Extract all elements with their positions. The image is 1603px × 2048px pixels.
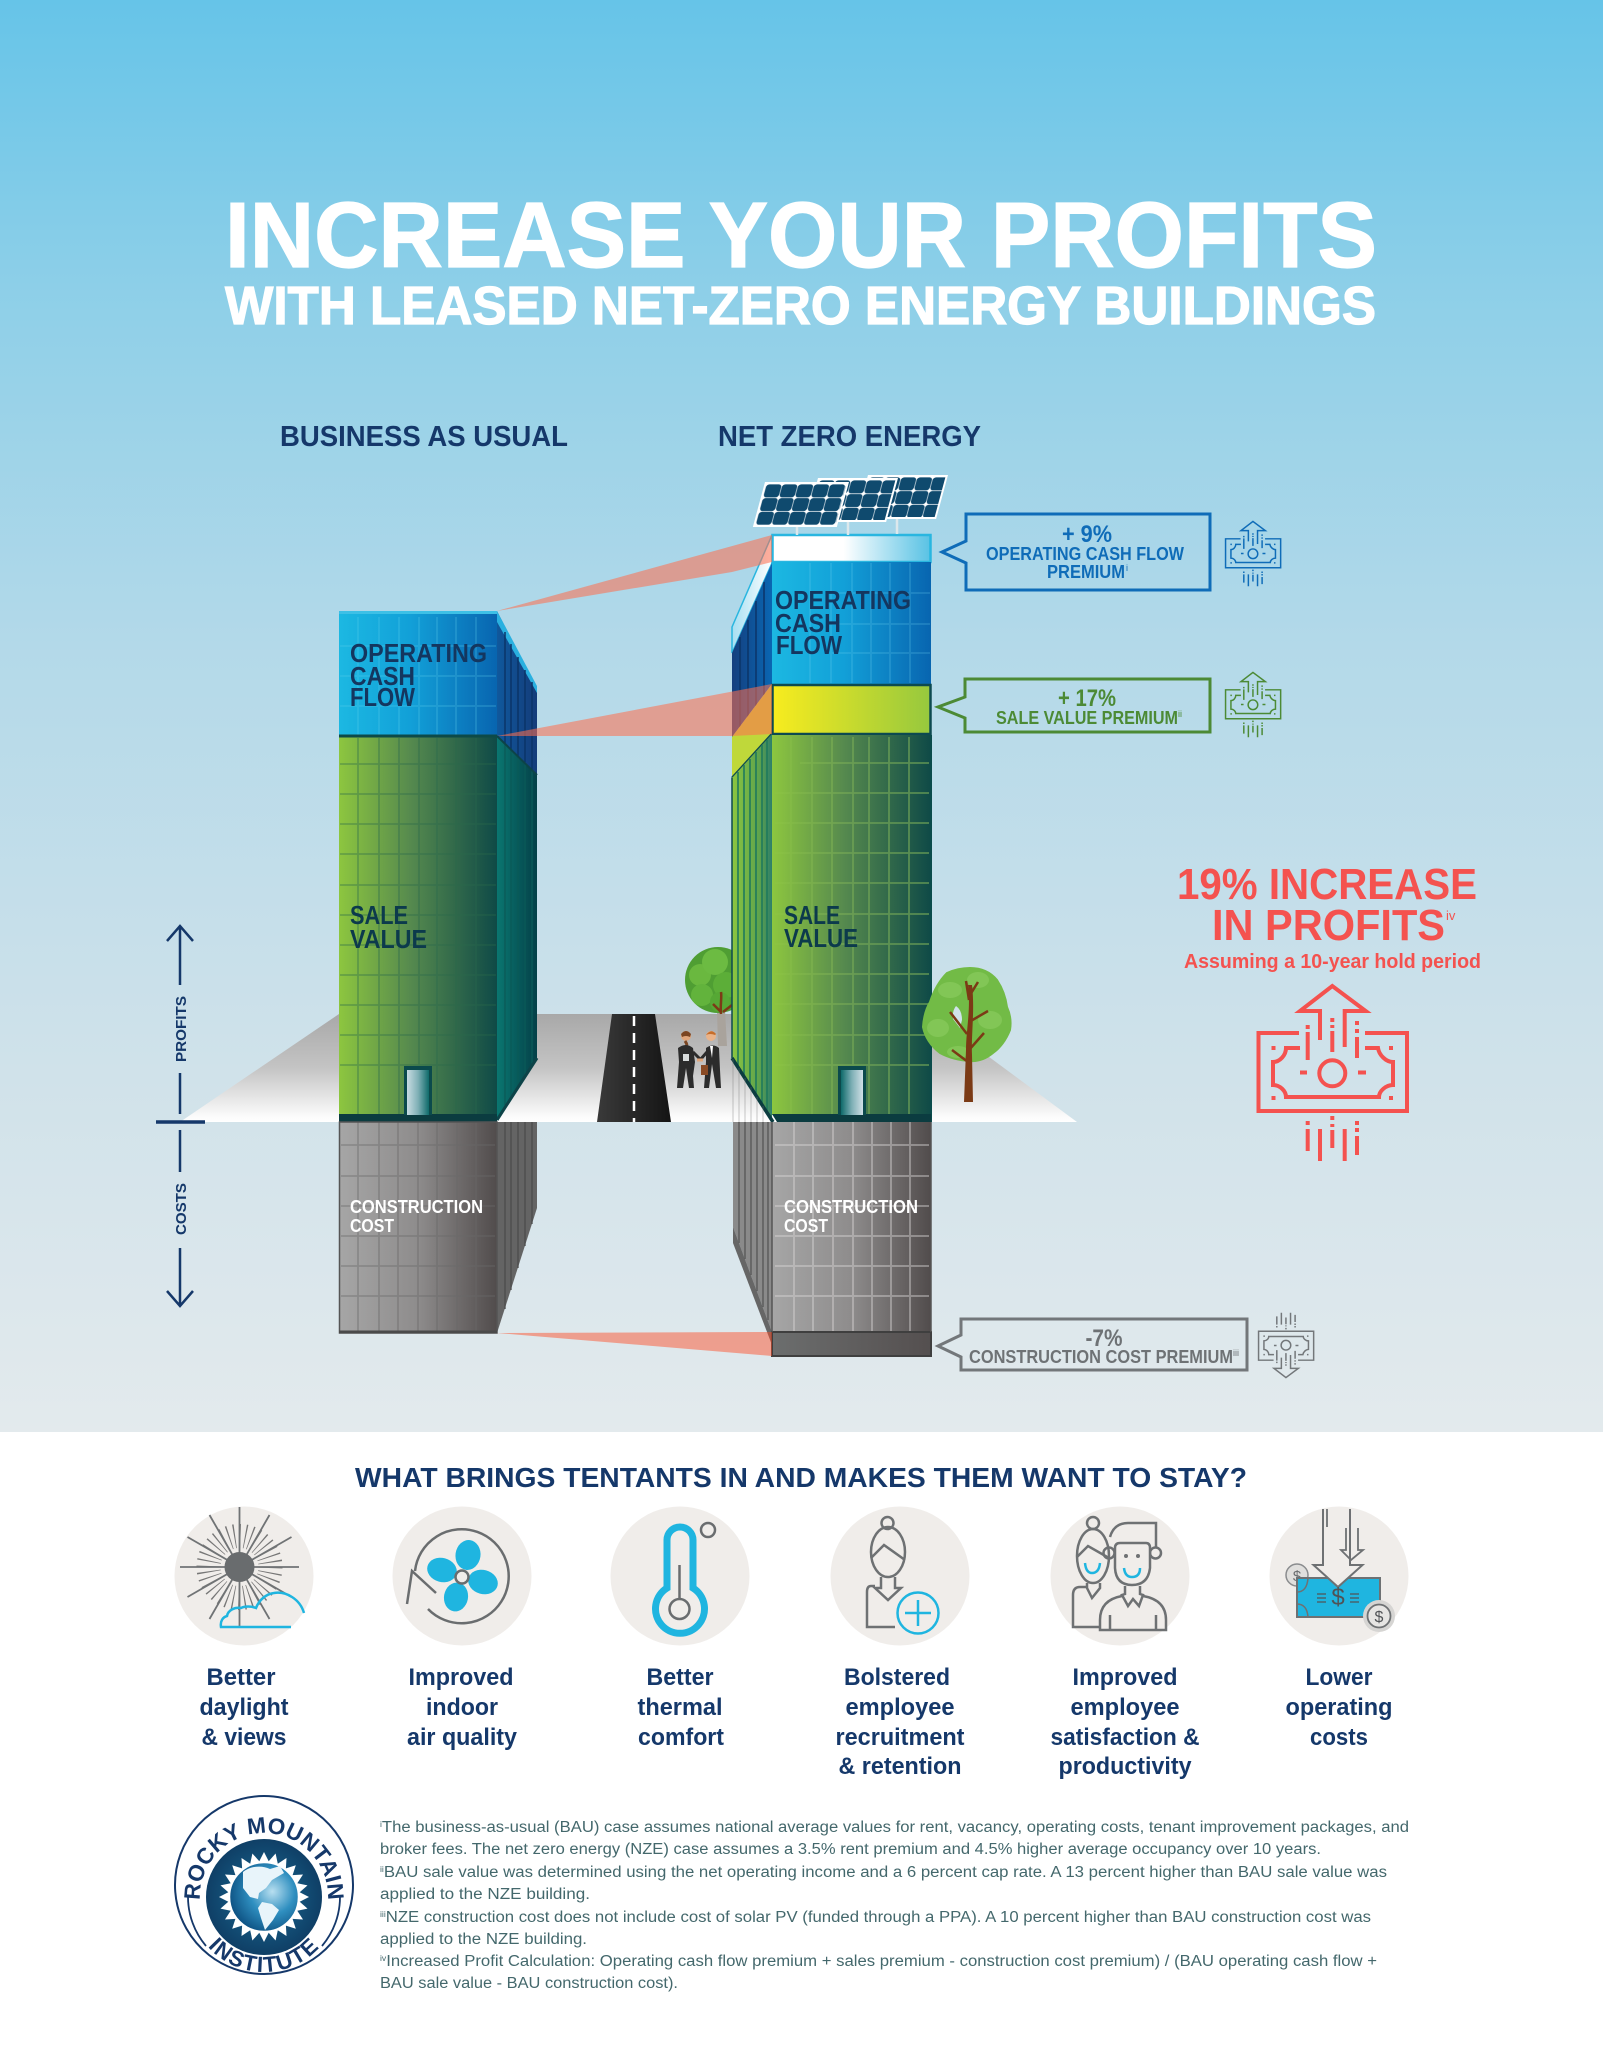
label: thermal comfort — [638, 1664, 724, 1751]
building labels: OPERATING — [350, 638, 487, 668]
icon: money up blue — [1226, 521, 1281, 586]
icon: thermometer — [610, 1506, 750, 1646]
label: satisfaction and productivity: Improved — [1072, 1664, 1178, 1691]
section: operating cash flow NZE — [732, 562, 931, 737]
footnotes: applied to the NZE building. — [380, 1886, 590, 1903]
label: satisfaction and productivity: employee — [1070, 1694, 1180, 1721]
label: daylight: Better — [206, 1664, 276, 1691]
callout: operating cash flow premium: PREMIUM — [1047, 562, 1125, 582]
building labels: VALUE — [784, 923, 858, 953]
section: sale value premium NZE — [732, 684, 930, 778]
door BAU — [404, 1066, 432, 1115]
building labels: COST — [350, 1216, 394, 1236]
label: lower operating costs: operating — [1286, 1694, 1392, 1721]
label: daylight — [200, 1664, 288, 1751]
heading: net zero energy: NET ZERO ENERGY — [718, 421, 981, 453]
callout: 19 percent increase in profits: iv — [1446, 908, 1456, 923]
icon: lower operating costs: $ — [1293, 1568, 1302, 1585]
building labels — [350, 585, 918, 1236]
footnotes: iii — [380, 1910, 386, 1919]
section: construction cost BAU — [339, 1122, 537, 1333]
section: operating cash flow BAU — [339, 611, 537, 775]
building labels: VALUE — [350, 924, 427, 954]
footnotes: i — [380, 1820, 382, 1829]
callout: sale value premium — [938, 679, 1210, 732]
label: recruitment and retention: Bolstered — [844, 1664, 950, 1691]
title: WITH LEASED NET-ZERO ENERGY BUILDINGS — [225, 276, 1376, 336]
label: satisfaction and productivity: productivity — [1058, 1753, 1192, 1780]
label: daylight: daylight — [200, 1694, 288, 1721]
highlight wedge: construction cost difference — [497, 1332, 772, 1356]
axis: profits and costs: COSTS — [173, 1183, 190, 1235]
background sky panel — [0, 0, 1603, 1432]
callout: construction cost premium: CONSTRUCTION COST PREMIUM — [969, 1347, 1233, 1367]
label: lower operating costs — [1286, 1664, 1392, 1751]
icon: money up red large — [1258, 986, 1407, 1161]
label: indoor air quality — [407, 1664, 518, 1751]
label: indoor air quality: Improved — [408, 1664, 514, 1691]
label: lower operating costs: Lower — [1306, 1664, 1372, 1691]
footnotes: The business-as-usual (BAU) case assumes national average values for rent, vacancy, operating costs, tenant improvement packages, and — [382, 1819, 1409, 1836]
solar panels — [753, 475, 948, 535]
label: recruitment and retention: recruitment — [836, 1724, 964, 1751]
label: indoor air quality: indoor — [426, 1694, 498, 1721]
callout: construction cost premium — [938, 1319, 1247, 1370]
axis: profits and costs: PROFITS — [173, 996, 190, 1062]
building labels: FLOW — [350, 682, 415, 712]
title: INCREASE YOUR PROFITS — [225, 183, 1377, 287]
road — [597, 1014, 671, 1122]
footnotes: Increased Profit Calculation: Operating cash flow premium + sales premium - construction cost premium) / (BAU operating cash flow + — [386, 1953, 1377, 1970]
building labels: OPERATING — [775, 585, 911, 615]
axis: profits and costs — [156, 926, 205, 1306]
footnotes: applied to the NZE building. — [380, 1931, 587, 1948]
highlight wedge: operating cash flow difference — [497, 535, 772, 611]
large tree — [923, 968, 1011, 1102]
logo: Rocky Mountain Institute: ROCKY MOUNTAIN — [184, 1817, 344, 1899]
callout: 19 percent increase in profits: Assuming a 10-year hold period — [1184, 951, 1481, 973]
building: net zero energy — [732, 535, 931, 1356]
heading: business as usual: BUSINESS AS USUAL — [280, 421, 568, 453]
callout: 19 percent increase in profits: 19% INCREASE — [1177, 861, 1477, 909]
icon: indoor air quality fan — [392, 1506, 532, 1646]
callout: 19 percent increase in profits: IN PROFITS — [1212, 902, 1445, 950]
building labels: CONSTRUCTION — [784, 1197, 918, 1217]
icon: lower operating costs: $ — [1331, 1584, 1345, 1611]
door NZE — [838, 1066, 866, 1115]
callout: operating cash flow premium: OPERATING CASH FLOW — [986, 544, 1184, 564]
callout: sale value premium: + 17% — [1058, 685, 1116, 712]
footnotes: broker fees. The net zero energy (NZE) case assumes a 3.5% rent premium and 4.5% higher average occupancy over 10 years. — [380, 1841, 1321, 1858]
footnotes: BAU sale value was determined using the net operating income and a 6 percent cap rate. A 13 percent higher than BAU sale value was — [384, 1864, 1387, 1881]
logo: Rocky Mountain Institute: INSTITUTE — [208, 1937, 319, 1972]
label: thermal comfort: thermal — [638, 1694, 722, 1721]
building labels: SALE — [784, 900, 840, 930]
section: sale value NZE — [732, 734, 931, 1122]
small tree behind building — [685, 947, 751, 1046]
building labels: COST — [784, 1216, 828, 1236]
logo: Rocky Mountain Institute — [174, 1795, 354, 1975]
building labels: CONSTRUCTION — [350, 1197, 483, 1217]
section: construction cost NZE — [733, 1059, 931, 1356]
label: lower operating costs: costs — [1310, 1724, 1368, 1751]
label: satisfaction and productivity — [1050, 1664, 1200, 1780]
icon: lower operating costs: $ — [1375, 1609, 1384, 1626]
callout: sale value premium: SALE VALUE PREMIUM — [996, 708, 1178, 728]
icon: satisfied employees — [1050, 1506, 1190, 1646]
label: recruitment and retention: employee — [846, 1694, 954, 1721]
footnotes: ii — [380, 1865, 384, 1874]
icon: money up green — [1226, 672, 1281, 737]
people shaking hands — [677, 1031, 721, 1088]
callout: 19 percent increase in profits — [1177, 861, 1481, 973]
highlight wedge: sale value difference — [497, 684, 772, 736]
ground plane — [180, 1014, 1077, 1122]
label: satisfaction and productivity: satisfaction & — [1050, 1724, 1200, 1751]
callout: construction cost premium: iii — [1233, 1348, 1239, 1358]
callout: operating cash flow premium: i — [1126, 563, 1128, 573]
section: sale value BAU — [339, 736, 537, 1122]
icon: lower operating costs — [1270, 1506, 1408, 1646]
section: operating cash flow premium NZE — [732, 535, 930, 653]
building labels: SALE — [350, 900, 408, 930]
building labels: CASH — [350, 661, 415, 691]
label: recruitment and retention — [836, 1664, 964, 1780]
callout: operating cash flow premium — [942, 514, 1210, 590]
callout: operating cash flow premium: + 9% — [1062, 521, 1112, 548]
icon: money down grey — [1259, 1313, 1314, 1378]
building labels: FLOW — [776, 630, 842, 660]
title — [225, 183, 1377, 336]
building labels: CASH — [775, 608, 841, 638]
label: daylight: & views — [202, 1724, 286, 1751]
white lower panel — [0, 1432, 1603, 2048]
label: recruitment and retention: & retention — [838, 1753, 962, 1780]
icon: daylight — [174, 1506, 314, 1646]
label: thermal comfort: comfort — [638, 1724, 724, 1751]
building: business as usual — [339, 611, 537, 1333]
footnotes — [380, 1819, 1409, 1992]
callout: sale value premium: ii — [1178, 709, 1182, 719]
label: indoor air quality: air quality — [407, 1724, 518, 1751]
footnotes: NZE construction cost does not include cost of solar PV (funded through a PPA). A 10 percent higher than BAU construction cost was — [386, 1909, 1371, 1926]
label: thermal comfort: Better — [646, 1664, 714, 1691]
callout: construction cost premium: -7% — [1086, 1325, 1122, 1352]
footnotes: BAU sale value - BAU construction cost). — [380, 1975, 678, 1992]
footnotes: iv — [380, 1954, 386, 1963]
heading: tenants question: WHAT BRINGS TENTANTS IN AND MAKES THEM WANT TO STAY? — [355, 1462, 1247, 1493]
icon: employee recruitment — [830, 1506, 970, 1646]
